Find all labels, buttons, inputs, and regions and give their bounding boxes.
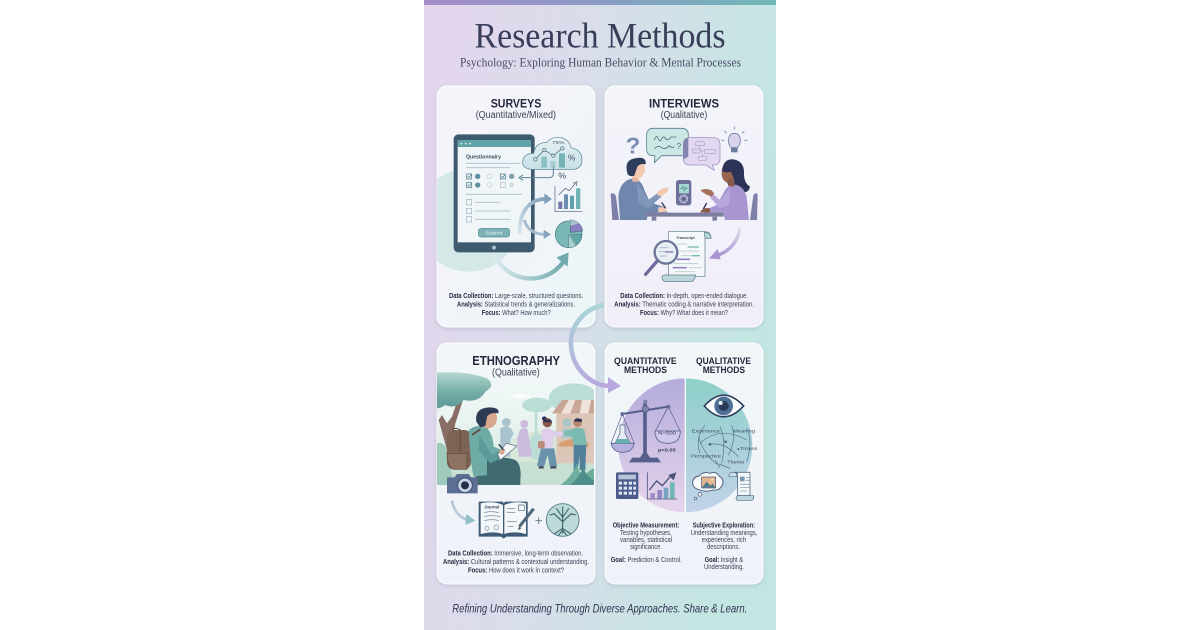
tablet: Questionnairy bbox=[466, 154, 501, 160]
panel: interviews bbox=[605, 86, 763, 327]
interviews subheading: (Qualitative) bbox=[661, 110, 707, 121]
interviews card bbox=[605, 86, 763, 327]
qualitative description: Subjective Exploration: bbox=[693, 523, 755, 530]
icon: balance scale: p<0.05 bbox=[658, 447, 676, 452]
surveys description bbox=[449, 293, 583, 317]
quantitative heading bbox=[614, 356, 677, 376]
interviews heading: INTERVIEWS bbox=[649, 98, 719, 110]
arrow: curved to journal bbox=[452, 501, 469, 520]
quantitative description: significance. bbox=[630, 544, 662, 551]
subtitle: Psychology: Exploring Human Behavior & Mental Processes bbox=[460, 56, 741, 70]
icon: thought bubble bbox=[693, 473, 723, 500]
man interviewer bbox=[611, 158, 668, 220]
seated researcher bbox=[447, 407, 521, 485]
icon: calculator bbox=[616, 472, 638, 499]
market stall bbox=[552, 400, 594, 463]
icon: data cloud: % bbox=[568, 154, 575, 163]
surveys heading: SURVEYS bbox=[491, 98, 542, 110]
icon: field journal: Journal bbox=[484, 505, 500, 510]
title: Research Methods bbox=[474, 16, 726, 56]
field scene bbox=[437, 372, 594, 485]
icon: bar chart bbox=[555, 182, 582, 212]
icon: balance scale bbox=[611, 400, 680, 462]
concept network: Meaning bbox=[733, 428, 755, 433]
surveys subheading: (Quantitative/Mixed) bbox=[476, 110, 556, 121]
surveys illustration bbox=[437, 134, 583, 281]
concept network: Perspective bbox=[691, 454, 721, 459]
surveys description: Focus: What? How much? bbox=[482, 310, 551, 317]
qualitative description: Goal: Insight & bbox=[705, 557, 743, 564]
arrow head: teal bbox=[556, 252, 569, 267]
concept network: Troves bbox=[740, 446, 758, 451]
qualitative description bbox=[691, 523, 757, 571]
quantitative description: Goal: Prediction & Control. bbox=[611, 557, 682, 564]
icon: transcript scroll: Transcript bbox=[676, 235, 695, 240]
qualitative description: Understanding meanings, bbox=[691, 530, 757, 537]
qualitative heading: QUALITATIVE bbox=[696, 356, 751, 367]
icon: magnifying glass bbox=[646, 241, 677, 274]
icon: tree roots circle bbox=[546, 504, 579, 536]
quantitative description bbox=[611, 523, 682, 564]
concept network bbox=[691, 425, 758, 468]
divider bbox=[683, 378, 687, 513]
woman interviewee bbox=[700, 159, 758, 220]
interviews description: Data Collection: In-depth, open-ended dialogue. bbox=[620, 293, 748, 300]
background figures bbox=[500, 418, 514, 457]
quantitative half circle bbox=[618, 378, 685, 512]
interviews description: Focus: Why? What does it mean? bbox=[640, 310, 728, 317]
icon: rising line chart bbox=[647, 472, 677, 499]
quantitative heading: QUANTITATIVE bbox=[614, 356, 677, 367]
ethnography subheading: (Qualitative) bbox=[492, 368, 540, 378]
icon: question mark: ? bbox=[626, 132, 640, 158]
icon: balance scale: N=500 bbox=[658, 430, 677, 435]
icon: light bulb bbox=[721, 127, 747, 152]
table bbox=[645, 213, 724, 221]
arrow: to pie from tablet bbox=[497, 260, 564, 281]
panel: comparison of methods bbox=[605, 343, 763, 584]
surveys description: Data Collection: Large-scale, structured questions. bbox=[449, 293, 583, 300]
interviews description: Analysis: Thematic coding & narrative interpretation. bbox=[614, 302, 754, 309]
ethnography illustration bbox=[437, 372, 610, 539]
ethnography description: Analysis: Cultural patterns & contextual understanding. bbox=[443, 559, 589, 566]
icon: data cloud: 75% bbox=[552, 140, 565, 145]
man at market bbox=[564, 418, 587, 470]
icon: voice recorder bbox=[676, 180, 691, 205]
foreground plant bbox=[560, 463, 594, 485]
arrow: to transcript bbox=[717, 227, 740, 256]
qualitative heading bbox=[696, 356, 751, 376]
ethnography description bbox=[443, 551, 589, 575]
woman at market bbox=[537, 416, 563, 467]
plus sign bbox=[535, 517, 542, 524]
teal speech bubble bbox=[647, 128, 688, 163]
distant trees bbox=[522, 383, 599, 460]
poster background bbox=[424, 0, 776, 630]
ethnography heading: ETHNOGRAPHY bbox=[472, 354, 561, 368]
icon: eye bbox=[704, 395, 744, 417]
surveys card bbox=[437, 86, 595, 327]
tablet bbox=[454, 134, 535, 252]
icon: data cloud bbox=[523, 137, 582, 169]
qualitative description: experiences, rich bbox=[702, 537, 746, 544]
purple speech bubble bbox=[683, 138, 720, 170]
top accent bar bbox=[424, 0, 776, 5]
icon: document scroll bbox=[729, 472, 754, 500]
interviews description bbox=[614, 293, 754, 317]
quantitative description: Testing hypotheses, bbox=[620, 530, 672, 537]
ethnography card bbox=[437, 343, 595, 584]
ethnography description: Data Collection: Immersive, long-term observation. bbox=[448, 551, 583, 558]
connector arrow: cloud to questionnaire bbox=[521, 167, 553, 178]
quantitative description: Objective Measurement: bbox=[613, 523, 679, 530]
quantitative description: variables, statistical bbox=[620, 537, 672, 544]
icon: field journal bbox=[479, 502, 534, 539]
icon: camera bbox=[447, 474, 478, 493]
comparison card bbox=[605, 343, 763, 584]
tablet: Submit bbox=[486, 230, 503, 235]
panel: surveys bbox=[417, 86, 595, 327]
comparison illustration bbox=[611, 378, 758, 513]
teal speech bubble: ? bbox=[676, 141, 681, 151]
qualitative description: Understanding. bbox=[704, 564, 744, 571]
ethnography description: Focus: How does it work in context? bbox=[468, 568, 564, 575]
qualitative heading: METHODS bbox=[703, 365, 745, 376]
panel: ethnography bbox=[437, 343, 610, 584]
concept network: Theme bbox=[727, 459, 745, 464]
icon: transcript scroll bbox=[662, 232, 711, 282]
arrow: connecting flow to comparison panel bbox=[571, 305, 621, 393]
qualitative description: descriptions. bbox=[707, 544, 740, 551]
arrow: tablet to pie chart bbox=[524, 220, 544, 234]
percent sign: % bbox=[558, 171, 566, 180]
arrow: tablet to bar chart bbox=[520, 199, 545, 233]
footer tagline: Refining Understanding Through Diverse Approaches. Share & Learn. bbox=[452, 602, 747, 616]
concept network: Experience bbox=[692, 428, 720, 433]
surveys description: Analysis: Statistical trends & generalizations. bbox=[457, 302, 575, 309]
qualitative half circle bbox=[686, 378, 752, 512]
quantitative heading: METHODS bbox=[624, 365, 667, 376]
icon: pie chart bbox=[555, 220, 583, 248]
foreground tree bbox=[439, 400, 463, 451]
background blob bbox=[437, 170, 508, 272]
interviews illustration bbox=[611, 127, 758, 282]
